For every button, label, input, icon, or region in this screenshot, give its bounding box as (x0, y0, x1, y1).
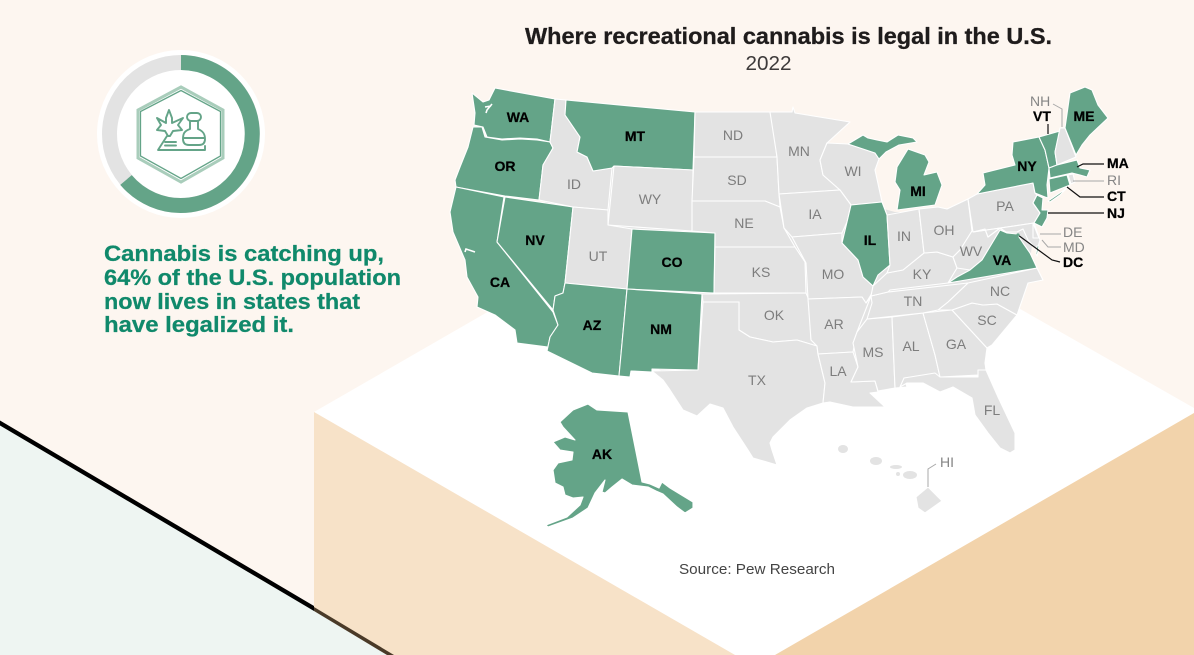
black diagonal line (0, 420, 394, 655)
state: KS: KS (752, 264, 770, 280)
headline callout: Cannabis is catching up, (104, 241, 384, 266)
state: MI: MI (910, 183, 926, 199)
state: MN: MN (788, 143, 810, 159)
state: CA (450, 187, 558, 347)
small state labels: DC (1063, 254, 1083, 270)
state: WA: WA (507, 109, 529, 125)
state: VA: VA (993, 252, 1011, 268)
state: TN (867, 283, 968, 319)
state: SC: SC (977, 312, 997, 328)
state: MS (851, 317, 895, 391)
icon: cannabis leaf, mortar and pestle (157, 110, 205, 150)
state: MI (848, 135, 942, 210)
state: ND: ND (723, 127, 743, 143)
state: AZ: AZ (583, 317, 602, 333)
state: NC (938, 268, 1043, 315)
state: KS (714, 247, 806, 293)
isometric platform: left face (314, 412, 735, 655)
donut remainder ring (110, 62, 252, 206)
state: TN: TN (904, 293, 922, 309)
state: VA (948, 230, 1039, 283)
state: NE (692, 201, 795, 247)
state: OK (702, 293, 817, 346)
state: GA: GA (946, 336, 967, 352)
state: VT (1039, 131, 1060, 168)
small state labels: NJ (1107, 205, 1125, 221)
state: NV: NV (525, 232, 545, 248)
state: SD (692, 157, 780, 207)
state: PA: PA (996, 198, 1014, 214)
state: NM: NM (650, 321, 672, 337)
Long Island (1048, 188, 1067, 202)
DC marker (1016, 233, 1020, 237)
black leader lines (1018, 124, 1104, 262)
state: AZ (547, 283, 627, 376)
state: WV: WV (960, 243, 983, 259)
gray leader lines (928, 104, 1104, 487)
small state labels: NH (1030, 93, 1050, 109)
state: OH (919, 199, 972, 257)
state: WY: WY (639, 191, 662, 207)
state: MT: MT (625, 128, 646, 144)
state: DE (1033, 223, 1039, 238)
state: NH (1055, 128, 1076, 165)
state: AK: AK (592, 446, 612, 462)
state: ME (1065, 87, 1108, 155)
U.S. map (450, 87, 1129, 527)
small state labels: VT (1033, 108, 1051, 124)
isometric platform: top surface (314, 158, 1194, 655)
headline callout: have legalized it. (104, 312, 294, 337)
state: WI: WI (844, 163, 862, 179)
state: AR: AR (824, 316, 844, 332)
state: NE: NE (734, 215, 754, 231)
state: CO (627, 229, 715, 293)
state: WA (472, 88, 555, 142)
state: NV (497, 197, 573, 310)
state: WI (820, 143, 882, 205)
small state labels: RI (1107, 172, 1121, 188)
mint corner panel (0, 425, 389, 655)
state: KY: KY (913, 266, 932, 282)
state: MA (1049, 160, 1090, 178)
state: SD: SD (727, 172, 747, 188)
state: OR: OR (494, 158, 516, 174)
state: AR (808, 296, 871, 354)
small state labels: MA (1107, 155, 1129, 171)
state: LA: LA (829, 363, 847, 379)
hexagon outline (138, 87, 223, 182)
state: NC: NC (990, 283, 1010, 299)
state: SC (952, 303, 1017, 348)
state: WY (608, 166, 693, 231)
state: TX (652, 302, 825, 465)
state: PA (968, 183, 1040, 232)
state: GA (923, 310, 987, 377)
state: NY: NY (1017, 158, 1037, 174)
state: UT: UT (589, 248, 608, 264)
isometric platform: right face (775, 413, 1194, 655)
state: NJ (1033, 195, 1048, 227)
Puget Sound and SF Bay details (465, 104, 492, 252)
state: HI (838, 445, 942, 513)
state: TX: TX (748, 372, 767, 388)
donut chart icon (97, 50, 265, 218)
state: WV (953, 228, 1006, 270)
state: NY (977, 137, 1049, 198)
headline callout (104, 241, 401, 337)
small state labels: HI (940, 454, 954, 470)
source: Source: Pew Research (679, 561, 835, 578)
title: Where recreational cannabis is legal in the U.S. (525, 23, 1052, 49)
state: ND (694, 112, 777, 157)
state: NM (619, 289, 702, 377)
state: IN: IN (897, 228, 911, 244)
state: LA (818, 352, 885, 407)
headline callout: 64% of the U.S. population (104, 265, 401, 290)
state: CA: CA (490, 274, 510, 290)
state: AL (892, 313, 940, 388)
state: MS: MS (862, 344, 884, 360)
small state labels (940, 93, 1129, 470)
state: ID (539, 99, 612, 210)
map backing silhouette (545, 110, 1035, 445)
state: ID: ID (567, 176, 581, 192)
state: OK: OK (764, 307, 785, 323)
state: MO: MO (822, 266, 844, 282)
state: KY (871, 252, 957, 296)
state: AL: AL (902, 338, 920, 354)
state: IA (779, 190, 851, 237)
state: IL (842, 202, 890, 286)
state: AK (546, 404, 693, 527)
state: MN (770, 107, 850, 194)
small state labels: DE (1063, 224, 1082, 240)
state: IA: IA (808, 206, 822, 222)
state: OR (455, 127, 553, 200)
state: ME: ME (1074, 108, 1094, 124)
small state labels: MD (1063, 239, 1085, 255)
state: RI (1068, 174, 1075, 184)
state: FL: FL (984, 402, 1000, 418)
state: MD (973, 223, 1040, 250)
state: IL: IL (864, 232, 877, 248)
headline callout: now lives in states that (104, 289, 361, 314)
state: CT (1049, 175, 1070, 193)
small state labels: CT (1107, 188, 1126, 204)
donut 64 percent arc (126, 62, 252, 205)
state: UT (565, 207, 632, 289)
state: MT (565, 100, 695, 171)
state: CO: CO (662, 254, 683, 270)
state: IN (887, 209, 924, 273)
state: MO (792, 233, 873, 303)
state: FL (900, 370, 1015, 453)
state: OH: OH (934, 222, 954, 238)
year subtitle: 2022 (746, 53, 792, 75)
